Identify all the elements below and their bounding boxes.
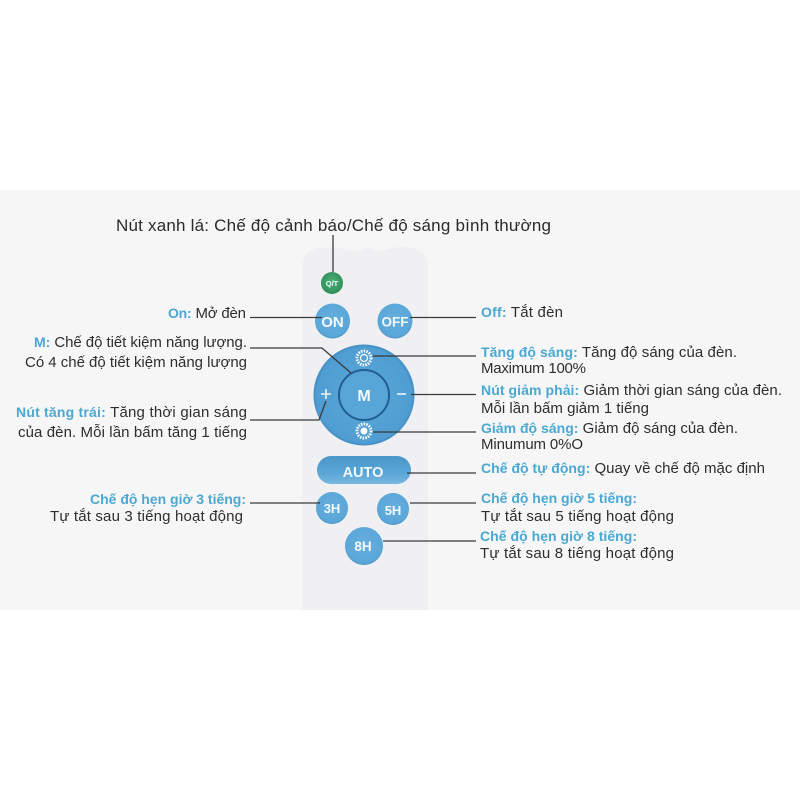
label: 3 hour timer: [50, 491, 246, 525]
label: brightness up: [481, 344, 737, 377]
ON button: ON: [321, 314, 344, 331]
8H button: [345, 527, 383, 565]
round control pad: [314, 344, 414, 446]
AUTO button: [317, 456, 411, 484]
OFF button: OFF: [382, 314, 408, 330]
label: 8 hour timer: [480, 528, 674, 562]
label: 5 hour timer: Tự tắt sau 5 tiếng hoạt động: [481, 508, 674, 525]
OFF button: [378, 304, 412, 338]
5H button: 5H: [385, 503, 401, 518]
remote control: [302, 247, 428, 610]
label: off: Off: Tắt đèn: [481, 304, 563, 321]
label: brightness down: Minumum 0%O: [481, 436, 583, 453]
remote body: [302, 247, 428, 610]
label: M mode: Có 4 chế độ tiết kiệm năng lượng: [25, 354, 247, 371]
3H button: [316, 492, 348, 524]
label: left increase button: Nút tăng trái: Tăng thời gian sáng: [16, 404, 247, 421]
green button: [321, 272, 343, 294]
label: auto mode: Chế độ tự động: Quay về chế độ mặc định: [481, 460, 765, 477]
label: 3 hour timer: Chế độ hẹn giờ 3 tiếng:: [90, 491, 246, 507]
label: brightness down: Giảm độ sáng: Giảm độ sáng của đèn.: [481, 420, 738, 437]
label: left increase button: [16, 404, 247, 441]
label: 8 hour timer: Tự tắt sau 8 tiếng hoạt động: [480, 545, 674, 562]
label: 8 hour timer: Chế độ hẹn giờ 8 tiếng:: [480, 528, 637, 544]
label: M mode: M: Chế độ tiết kiệm năng lượng.: [34, 334, 247, 351]
icon: minus: [397, 393, 406, 395]
label: 5 hour timer: [481, 490, 674, 525]
AUTO button: AUTO: [343, 465, 383, 481]
M button: M: [357, 388, 371, 405]
label: M mode: [25, 334, 247, 371]
leader lines: [250, 235, 476, 541]
label: 3 hour timer: Tự tắt sau 3 tiếng hoạt động: [50, 508, 243, 525]
ON button: [315, 304, 350, 338]
label: left increase button: của đèn. Mỗi lần bấm tăng 1 tiếng: [18, 424, 247, 441]
8H button: 8H: [354, 539, 372, 554]
label: on: On: Mở đèn: [168, 305, 246, 322]
background panel: [0, 190, 800, 610]
icon: brightness up: [357, 351, 371, 365]
label: right decrease button: Nút giảm phải: Giảm thời gian sáng của đèn.: [481, 382, 782, 399]
5H button: [377, 493, 409, 525]
green button: Q/T: [326, 279, 339, 288]
label: brightness down: [481, 420, 738, 453]
label: right decrease button: [481, 382, 782, 417]
3H button: 3H: [324, 501, 340, 516]
icon: brightness down: [357, 424, 371, 438]
label: brightness up: Maximum 100%: [481, 360, 586, 377]
title: Nút xanh lá: Chế độ cảnh báo/Chế độ sáng bình thường: [116, 216, 551, 235]
icon: plus: [321, 389, 331, 399]
label: brightness up: Tăng độ sáng: Tăng độ sáng của đèn.: [481, 344, 737, 361]
label: right decrease button: Mỗi lần bấm giảm 1 tiếng: [481, 400, 649, 417]
label: 5 hour timer: Chế độ hẹn giờ 5 tiếng:: [481, 490, 637, 506]
